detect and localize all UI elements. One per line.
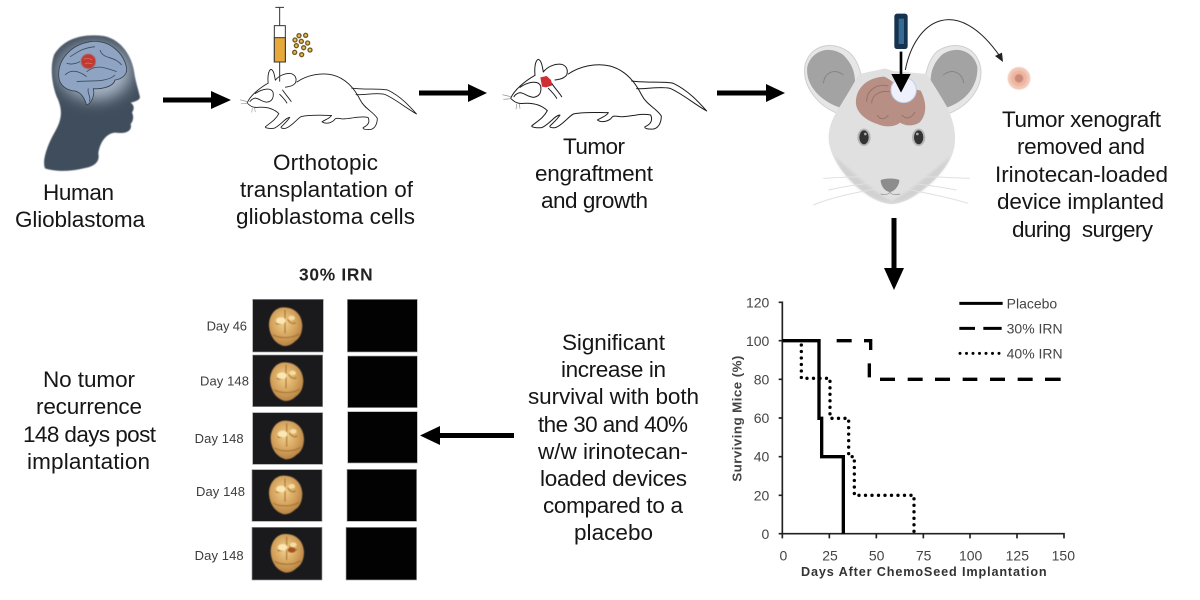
label: orthotopic transplantation: transplantation of xyxy=(240,177,414,202)
y tick labels: 40 xyxy=(754,449,770,465)
x axis title: Days After ChemoSeed Implantation xyxy=(801,565,1047,579)
arrow: head to transplantation xyxy=(163,91,231,109)
label: survival finding: loaded devices xyxy=(540,466,687,491)
implant cavity xyxy=(891,77,916,103)
row: day 148: Day 148 xyxy=(195,431,244,446)
series: placebo xyxy=(782,341,843,534)
panel title: 30% IRN xyxy=(299,265,373,285)
axes xyxy=(779,302,1064,538)
x tick labels xyxy=(779,548,1075,564)
nose xyxy=(881,178,899,192)
row: day 148 xyxy=(200,355,417,408)
label: no recurrence: 148 days post xyxy=(23,422,157,447)
label: tumor engraftment: Tumor xyxy=(563,134,626,159)
x tick labels: 0 xyxy=(779,548,787,564)
label: human glioblastoma xyxy=(15,180,145,232)
label: surgery step xyxy=(995,107,1168,242)
cell cluster xyxy=(293,33,312,57)
label: survival finding: the 30 and 40% xyxy=(538,412,688,437)
syringe xyxy=(274,7,285,82)
survival chart xyxy=(730,294,1075,579)
row: day 148 xyxy=(196,469,417,521)
tumor in brain xyxy=(81,54,96,69)
face xyxy=(829,68,955,204)
imaging panel: 30% IRN xyxy=(195,265,417,580)
label: surgery step: during surgery xyxy=(1012,217,1154,242)
legend xyxy=(959,295,1063,361)
label: orthotopic transplantation: glioblastoma cells xyxy=(236,204,415,229)
row: day 148: Day 148 xyxy=(200,373,249,388)
row: day 46 xyxy=(207,299,417,352)
arrow: surgery to survival chart xyxy=(884,218,904,290)
series: 40% IRN xyxy=(801,345,914,533)
eyes xyxy=(857,129,925,146)
arrow: chart to imaging xyxy=(420,426,514,445)
y tick labels xyxy=(746,294,770,542)
label: survival finding xyxy=(528,330,699,545)
row: day 148 xyxy=(195,412,417,464)
x tick labels: 125 xyxy=(1006,548,1029,564)
arrow: tumor removal xyxy=(905,20,1001,70)
label: survival finding: increase in xyxy=(561,357,666,382)
series: 30% IRN xyxy=(837,341,1061,379)
label: no recurrence xyxy=(23,367,157,474)
icon: mouse with tumor xyxy=(502,59,707,129)
y tick labels: 80 xyxy=(754,371,770,387)
label: surgery step: device implanted xyxy=(997,189,1164,214)
y tick labels: 60 xyxy=(754,410,770,426)
label: survival finding: placebo xyxy=(574,520,653,545)
label: tumor engraftment: and growth xyxy=(541,188,648,213)
legend: 30% IRN xyxy=(1007,320,1063,336)
brain in head xyxy=(59,41,127,105)
label: orthotopic transplantation xyxy=(236,150,415,229)
icon: human head with glioblastoma xyxy=(44,35,140,171)
icon: mouse receiving cells by syringe xyxy=(240,7,416,130)
label: no recurrence: recurrence xyxy=(36,394,142,419)
x tick labels: 75 xyxy=(916,548,932,564)
label: orthotopic transplantation: Orthotopic xyxy=(273,150,378,175)
label: tumor engraftment: engraftment xyxy=(535,161,654,186)
label: no recurrence: No tumor xyxy=(43,367,136,392)
arrow: device insertion xyxy=(891,52,911,93)
label: survival finding: survival with both xyxy=(528,384,699,409)
y tick labels: 100 xyxy=(746,333,770,349)
y tick labels: 20 xyxy=(754,487,770,503)
row: day 46: Day 46 xyxy=(207,319,247,334)
arrow: transplantation to engraftment xyxy=(419,84,487,102)
x tick labels: 150 xyxy=(1052,548,1075,564)
irinotecan device xyxy=(894,14,908,49)
arrow: engraftment to surgery xyxy=(717,84,785,102)
red tumor xyxy=(540,76,552,87)
icon: mouse head surgery xyxy=(805,14,1030,205)
label: surgery step: Tumor xenograft xyxy=(1002,107,1162,132)
label: surgery step: Irinotecan-loaded xyxy=(995,162,1168,187)
label: survival finding: Significant xyxy=(562,330,666,355)
exposed brain xyxy=(856,77,925,126)
y tick labels: 0 xyxy=(762,526,770,542)
label: survival finding: w/w irinotecan- xyxy=(537,439,688,464)
y tick labels: 120 xyxy=(746,294,770,310)
row: day 148: Day 148 xyxy=(195,548,244,563)
label: no recurrence: implantation xyxy=(27,449,150,474)
x tick labels: 25 xyxy=(822,548,838,564)
whiskers xyxy=(813,177,970,205)
removed tumor xyxy=(1008,67,1030,90)
ears xyxy=(805,45,981,115)
mouse outline xyxy=(240,69,416,130)
label: human glioblastoma: Glioblastoma xyxy=(15,207,145,232)
legend: Placebo xyxy=(1007,295,1057,311)
legend: 40% IRN xyxy=(1007,345,1063,361)
x tick labels: 100 xyxy=(959,548,983,564)
label: surgery step: removed and xyxy=(1017,134,1145,159)
x tick labels: 50 xyxy=(869,548,885,564)
head glow xyxy=(58,43,132,100)
label: survival finding: compared to a xyxy=(543,493,683,518)
label: tumor engraftment xyxy=(535,134,654,213)
row: day 148 xyxy=(195,527,417,580)
label: human glioblastoma: Human xyxy=(43,180,114,205)
row: day 148: Day 148 xyxy=(196,484,245,499)
y axis title: Surviving Mice (%) xyxy=(730,356,745,482)
